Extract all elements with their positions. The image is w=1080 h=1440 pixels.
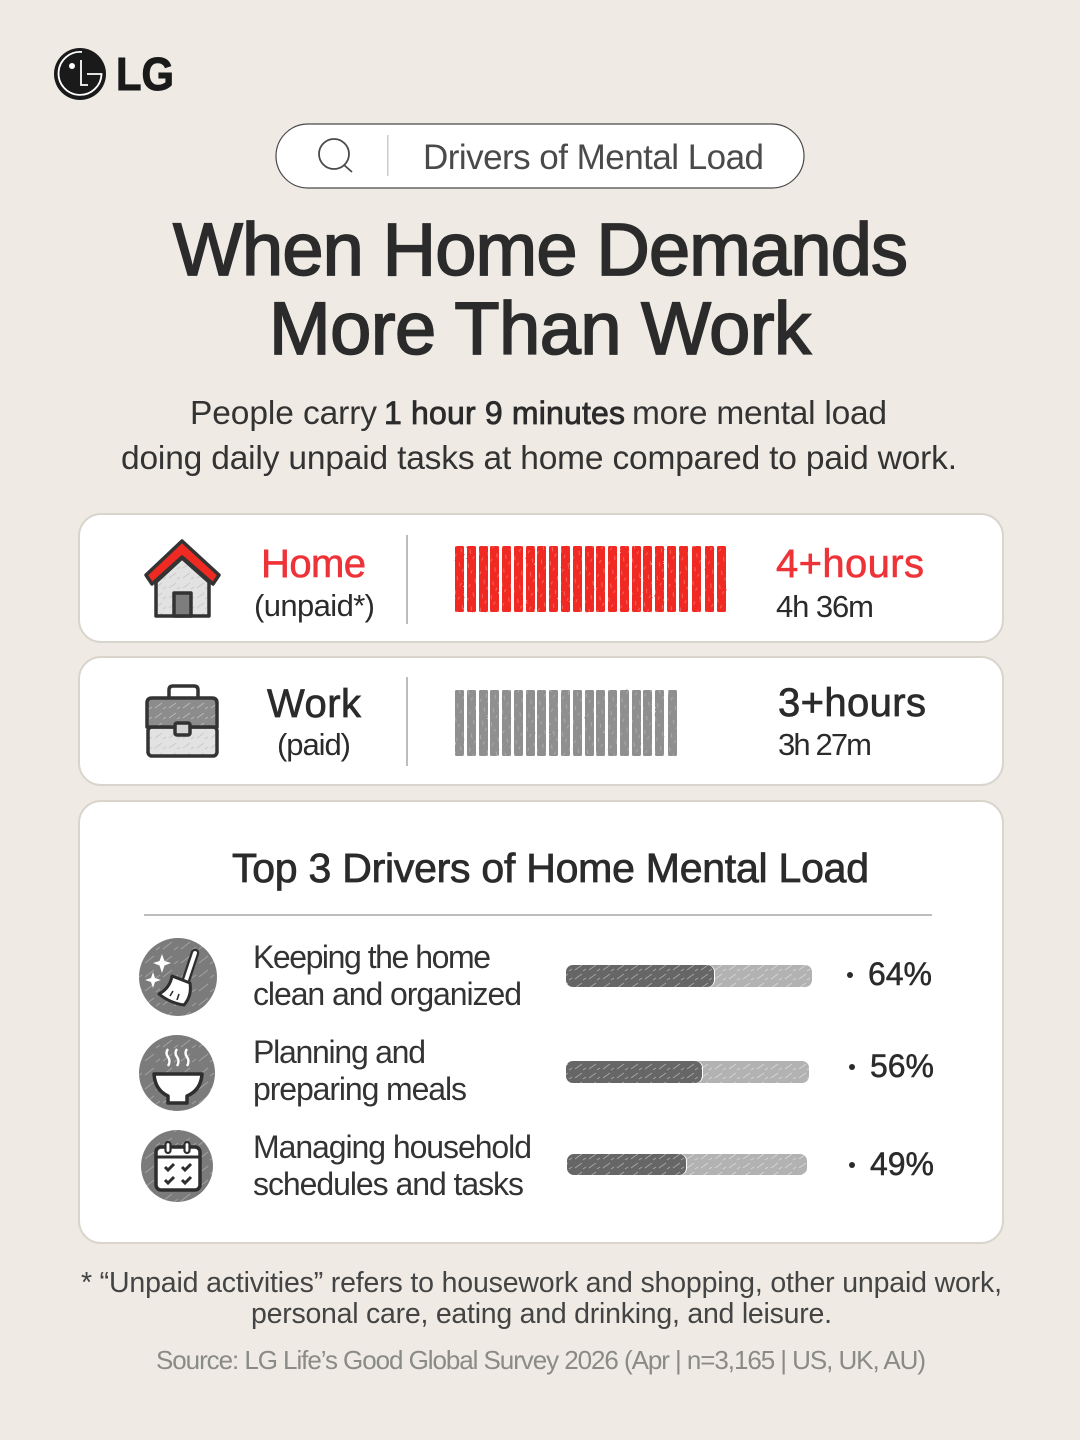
icon: briefcase [147, 686, 217, 756]
driver: cleaning [139, 938, 932, 1016]
home value: 4h 36m [776, 589, 874, 624]
home value: 4+hours [776, 542, 924, 586]
driver: meals [139, 1034, 934, 1111]
driver: meals: preparing meals [253, 1071, 467, 1107]
icon: calendar [141, 1130, 213, 1202]
icon: house [146, 541, 219, 616]
home label [254, 542, 375, 623]
footnote: personal care, eating and drinking, and leisure. [251, 1298, 832, 1330]
footnote [81, 1267, 1002, 1330]
subtitle: doing daily unpaid tasks at home compared to paid work. [121, 440, 957, 477]
bar: 49% [567, 1154, 807, 1175]
LG logo [54, 48, 174, 100]
driver: schedules: Managing household [253, 1129, 532, 1165]
work value: 3h 27m [778, 727, 872, 762]
bar: 56% [566, 1061, 809, 1083]
title: More Than Work [269, 287, 812, 370]
bar: work hours [455, 690, 677, 756]
title [173, 208, 908, 370]
driver: cleaning: Keeping the home [253, 939, 491, 975]
work label: Work [267, 682, 362, 726]
title: When Home Demands [173, 208, 908, 291]
heading: Top 3 Drivers of Home Mental Load [232, 845, 869, 891]
icon: magnifier [319, 139, 352, 172]
home value [776, 542, 924, 624]
search pill: Drivers of Mental Load [423, 138, 764, 177]
driver: schedules [141, 1129, 934, 1202]
footnote: * “Unpaid activities” refers to housework and shopping, other unpaid work, [81, 1267, 1002, 1299]
driver: schedules: 49% [870, 1146, 934, 1182]
subtitle [121, 395, 957, 477]
bar: 64% [566, 965, 812, 987]
search pill [276, 124, 804, 188]
icon: bowl [139, 1035, 215, 1111]
panel: top 3 drivers [79, 801, 1003, 1243]
subtitle: more mental load [632, 395, 887, 432]
driver: meals: Planning and [253, 1034, 426, 1070]
LG logo: LG [116, 48, 174, 100]
icon: broom [139, 938, 217, 1016]
panel: home [79, 514, 1003, 642]
work label: (paid) [277, 727, 351, 762]
work label [267, 682, 362, 762]
subtitle: People carry [190, 395, 377, 432]
driver: cleaning: clean and organized [253, 976, 522, 1012]
panel: work [79, 657, 1003, 785]
home label: Home [261, 542, 366, 586]
subtitle: 1 hour 9 minutes [384, 395, 625, 431]
source: Source: LG Life’s Good Global Survey 2026 (Apr | n=3,165 | US, UK, AU) [156, 1345, 926, 1375]
driver: meals: 56% [870, 1048, 934, 1084]
work value [778, 681, 926, 762]
bar: home hours [455, 546, 726, 612]
driver: cleaning: 64% [868, 956, 932, 992]
work value: 3+hours [778, 681, 926, 725]
driver: schedules: schedules and tasks [253, 1166, 524, 1202]
home label: (unpaid*) [254, 588, 375, 623]
